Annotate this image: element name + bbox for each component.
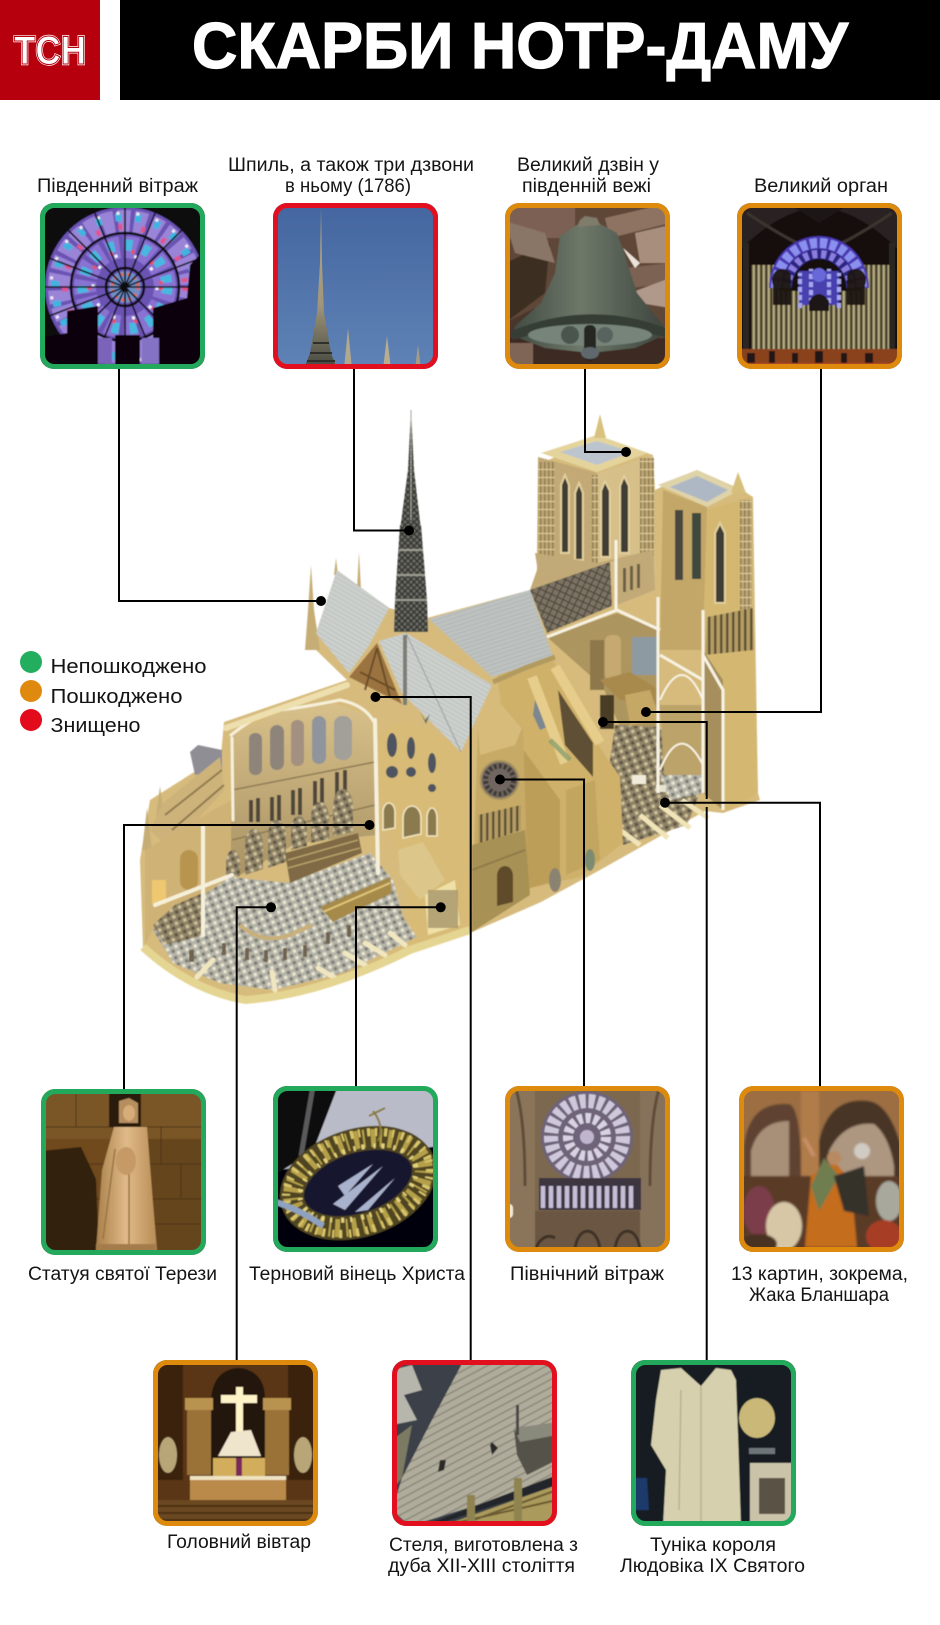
caption: oak roof: дуба XII-XIII століття	[388, 1556, 575, 1577]
choir stalls	[285, 833, 362, 883]
card: oak roof	[392, 1360, 557, 1526]
legend: damaged: Пошкоджено	[50, 686, 182, 708]
photo: golden reliquary crown	[273, 1086, 443, 1252]
west tower, south: left and right faces	[530, 457, 597, 590]
status border: green	[634, 1362, 794, 1524]
legend: undamaged: Непошкоджено	[50, 656, 206, 678]
connector: crown of thorns	[356, 907, 441, 1086]
logo: TSN red square: ТСН	[14, 29, 86, 73]
connector: tunic of Louis IX	[603, 722, 707, 1360]
card: crown of thorns	[273, 1086, 443, 1252]
main west roof	[429, 590, 553, 677]
status border: orange	[742, 1088, 902, 1250]
photo: baroque painting	[739, 1086, 904, 1254]
caption: spire: в ньому (1786)	[285, 176, 411, 197]
card: south rose window	[40, 203, 206, 369]
connector: north rose window	[500, 780, 584, 1086]
photo: organ with rose window	[737, 203, 902, 369]
apse outer rim	[143, 930, 470, 1000]
connector: spire	[354, 369, 409, 530]
card: spire	[273, 203, 438, 369]
transept front roof	[379, 633, 492, 752]
photo: tunic on display	[631, 1360, 796, 1526]
title banner	[120, 0, 940, 100]
caption: north rose window: Північний вітраж	[510, 1264, 664, 1285]
status border: orange	[156, 1362, 316, 1524]
photo: roof of the cathedral	[392, 1360, 557, 1526]
transept facade	[471, 697, 528, 932]
caption: paintings: 13 картин, зокрема,	[731, 1264, 908, 1285]
north tower interior lower	[703, 650, 723, 810]
caption: crown of thorns: Терновий вінець Христа	[249, 1264, 465, 1285]
clerestory windows	[249, 716, 352, 775]
card: great organ	[737, 203, 902, 369]
cathedral cutaway illustration	[140, 410, 760, 1002]
connector: great bell	[585, 369, 626, 452]
apse lower wall	[145, 800, 233, 945]
south tower pointed windows	[561, 475, 629, 560]
south tower top platform	[541, 435, 648, 472]
caption: paintings: Жака Бланшара	[749, 1285, 889, 1306]
caption: spire	[228, 155, 474, 197]
nave arcade arches	[226, 789, 353, 880]
caption: oak roof	[388, 1535, 578, 1577]
caption: oak roof: Стеля, виготовлена з	[389, 1535, 578, 1556]
caption: great bell	[517, 155, 660, 197]
facade gallery and portal	[478, 805, 521, 845]
altar rail and furniture	[240, 925, 312, 938]
west nave interior with organ	[547, 613, 660, 727]
caption: paintings	[731, 1264, 908, 1306]
photo: north rose interior	[505, 1086, 670, 1252]
cathedral base silhouette	[140, 437, 760, 1002]
north tower cut section	[660, 490, 707, 650]
apse pinnacles	[142, 552, 361, 850]
flying buttresses of the apse	[150, 757, 224, 850]
caption: tunic of Louis IX: Туніка короля	[650, 1535, 776, 1556]
nave floor	[153, 853, 417, 990]
apse roof	[316, 570, 389, 673]
card: main altar	[153, 1360, 318, 1526]
caption: spire: Шпиль, а також три дзвони	[228, 155, 474, 176]
status border: red	[276, 206, 436, 366]
spire	[394, 410, 428, 632]
status border: green	[276, 1088, 436, 1250]
status border: orange	[508, 206, 668, 366]
interior choir wall	[231, 704, 377, 880]
legend: destroyed: Знищено	[50, 715, 140, 737]
legend: undamaged	[20, 651, 206, 678]
connector: oak roof	[376, 697, 471, 1360]
photo: stained glass rose	[40, 203, 206, 369]
logo: TSN red square: ТСН	[14, 29, 86, 73]
marker dots	[266, 447, 670, 912]
legend: destroyed	[20, 709, 140, 737]
photo: bell among timbers	[505, 203, 670, 369]
caption: great bell: Великий дзвін у	[517, 155, 660, 176]
caption: great organ: Великий орган	[754, 176, 888, 197]
card: great bell	[505, 203, 670, 369]
photo: altar with cross	[153, 1360, 318, 1526]
photo: statue in niche	[41, 1089, 206, 1255]
roof timber section	[349, 643, 402, 704]
legend: damaged	[20, 680, 182, 708]
connector: great organ	[646, 369, 821, 712]
nave north side with flying buttresses	[497, 660, 623, 890]
status border: orange	[508, 1088, 668, 1250]
card: paintings	[739, 1086, 904, 1254]
caption: tunic of Louis IX	[620, 1535, 805, 1577]
card: north rose window	[505, 1086, 670, 1252]
status border: green	[44, 1092, 204, 1252]
south transept section wall	[380, 720, 470, 950]
status border: orange	[740, 206, 900, 366]
legend	[20, 651, 206, 737]
card: tunic of Louis IX	[631, 1360, 796, 1526]
caption: main altar: Головний вівтар	[167, 1532, 311, 1553]
status border: red	[394, 1362, 554, 1524]
status border: green	[42, 206, 202, 366]
photo: spire against the sky	[273, 203, 438, 369]
south tower gallery	[535, 550, 655, 605]
white section lines of the apse	[155, 685, 405, 990]
connector: statue of Therese	[124, 825, 370, 1089]
white section lines of the towers	[547, 540, 723, 845]
caption: statue of Therese: Статуя святої Терези	[28, 1264, 217, 1285]
west nave floor	[610, 725, 700, 845]
caption: south rose window: Південний вітраж	[37, 176, 198, 197]
card: statue of Therese	[41, 1089, 206, 1255]
connector lines and markers	[119, 369, 821, 1360]
logo: TSN red square	[0, 0, 100, 100]
title banner: СКАРБИ НОТР-ДАМУ	[192, 9, 850, 82]
connector: main altar	[237, 907, 271, 1360]
triforium lancets	[249, 770, 347, 822]
rose window on the facade	[481, 761, 519, 799]
connector: paintings	[665, 803, 820, 1086]
timber lattice of the nave	[530, 562, 612, 633]
caption: tunic of Louis IX: Людовіка IX Святого	[620, 1556, 805, 1577]
caption: great bell: південній вежі	[522, 176, 651, 197]
connector: south rose window	[119, 369, 321, 601]
